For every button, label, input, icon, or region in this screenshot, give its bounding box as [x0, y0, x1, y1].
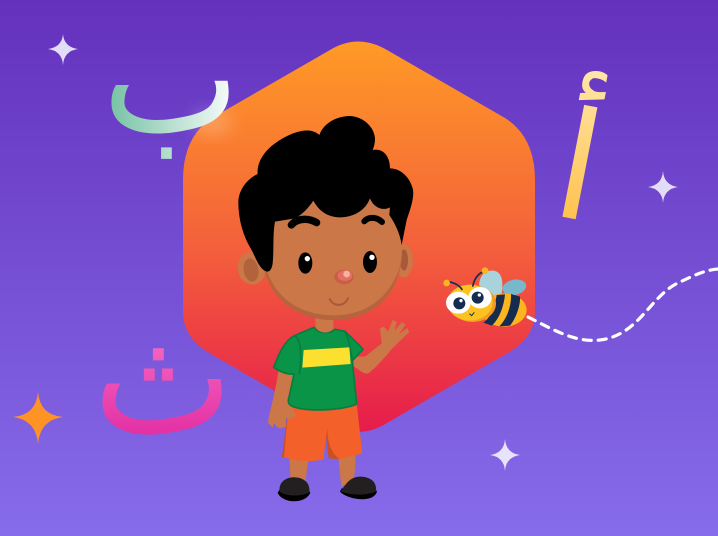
bee antennae	[448, 272, 483, 290]
sparkle: bottom	[490, 439, 520, 471]
boy left arm	[268, 372, 296, 428]
eyebrows	[291, 219, 317, 225]
boy shoes	[278, 477, 377, 501]
boy shorts	[282, 403, 362, 461]
mouth	[330, 298, 348, 305]
bee wings	[479, 271, 502, 300]
nose	[334, 270, 354, 284]
boy shirt	[274, 327, 363, 410]
bee mouth	[469, 312, 474, 316]
boy head	[235, 116, 413, 320]
letter: tha: ث	[93, 281, 233, 473]
character: bee	[443, 267, 528, 327]
bee head	[449, 285, 496, 322]
hexagon panel	[183, 42, 535, 432]
bee body	[481, 293, 527, 327]
sparkle: right	[648, 171, 678, 203]
sparkle: orange	[13, 392, 63, 444]
left ear	[235, 249, 269, 287]
boy shirt stripe	[302, 347, 351, 368]
right ear	[395, 244, 413, 277]
bee eyes	[446, 292, 471, 314]
boy right arm and hand	[352, 320, 409, 374]
boy legs	[289, 453, 356, 487]
sparkle: top left	[48, 34, 78, 65]
boy neck	[315, 318, 333, 332]
letter: alef with hamza: أ	[542, 67, 618, 257]
face	[263, 187, 402, 320]
eyes	[298, 252, 312, 274]
flight path	[528, 269, 718, 340]
hair	[238, 116, 413, 272]
character: boy	[235, 116, 413, 501]
